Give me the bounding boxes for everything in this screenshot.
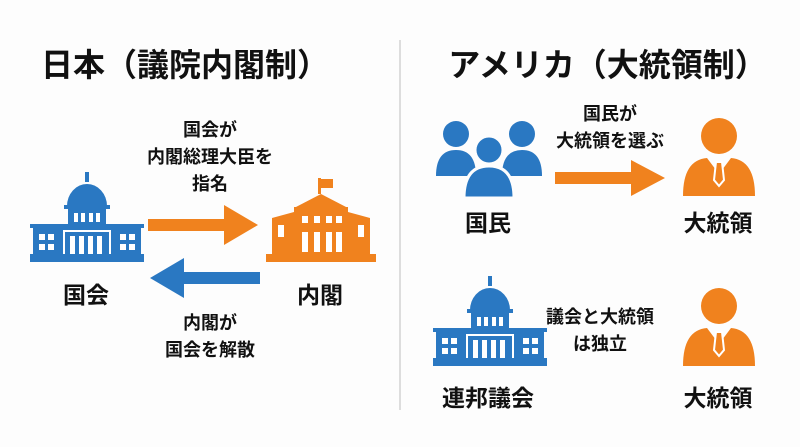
text: independent: 議会と大統領 — [546, 307, 654, 327]
label: 国民: 国民 — [465, 210, 511, 236]
text: nominates PM: 国会が — [183, 120, 237, 140]
arrow: orange right — [148, 205, 258, 245]
text: independent: は独立 — [573, 334, 627, 354]
label: 大統領 2: 大統領 — [684, 385, 752, 411]
arrow: blue left — [150, 258, 260, 298]
text: dissolves Diet: 国会を解散 — [165, 340, 255, 360]
icon: people — [436, 121, 542, 196]
title: Japan: 日本（議院内閣制） — [41, 47, 329, 83]
text: independent — [546, 307, 654, 354]
text: dissolves Diet — [165, 313, 255, 360]
text: people elect president: 大統領を選ぶ — [556, 131, 664, 151]
label: 連邦議会: 連邦議会 — [442, 385, 534, 411]
label: 大統領: 大統領 — [684, 210, 752, 236]
icon: president — [683, 118, 755, 196]
text: nominates PM: 指名 — [192, 174, 228, 194]
icon: president 2 — [683, 288, 755, 366]
divider — [399, 40, 401, 410]
icon: Diet building — [30, 172, 144, 262]
text: dissolves Diet: 内閣が — [183, 313, 237, 333]
arrow: orange right — [555, 160, 665, 196]
label: 内閣: 内閣 — [297, 282, 343, 308]
text: people elect president: 国民が — [583, 104, 637, 124]
label: 国会: 国会 — [63, 282, 109, 308]
text: people elect president — [556, 104, 664, 151]
icon: Congress — [433, 276, 547, 366]
text: nominates PM — [147, 120, 273, 194]
text: nominates PM: 内閣総理大臣を — [147, 147, 273, 167]
title: USA: アメリカ（大統領制） — [448, 47, 767, 83]
icon: Cabinet building — [266, 178, 376, 262]
